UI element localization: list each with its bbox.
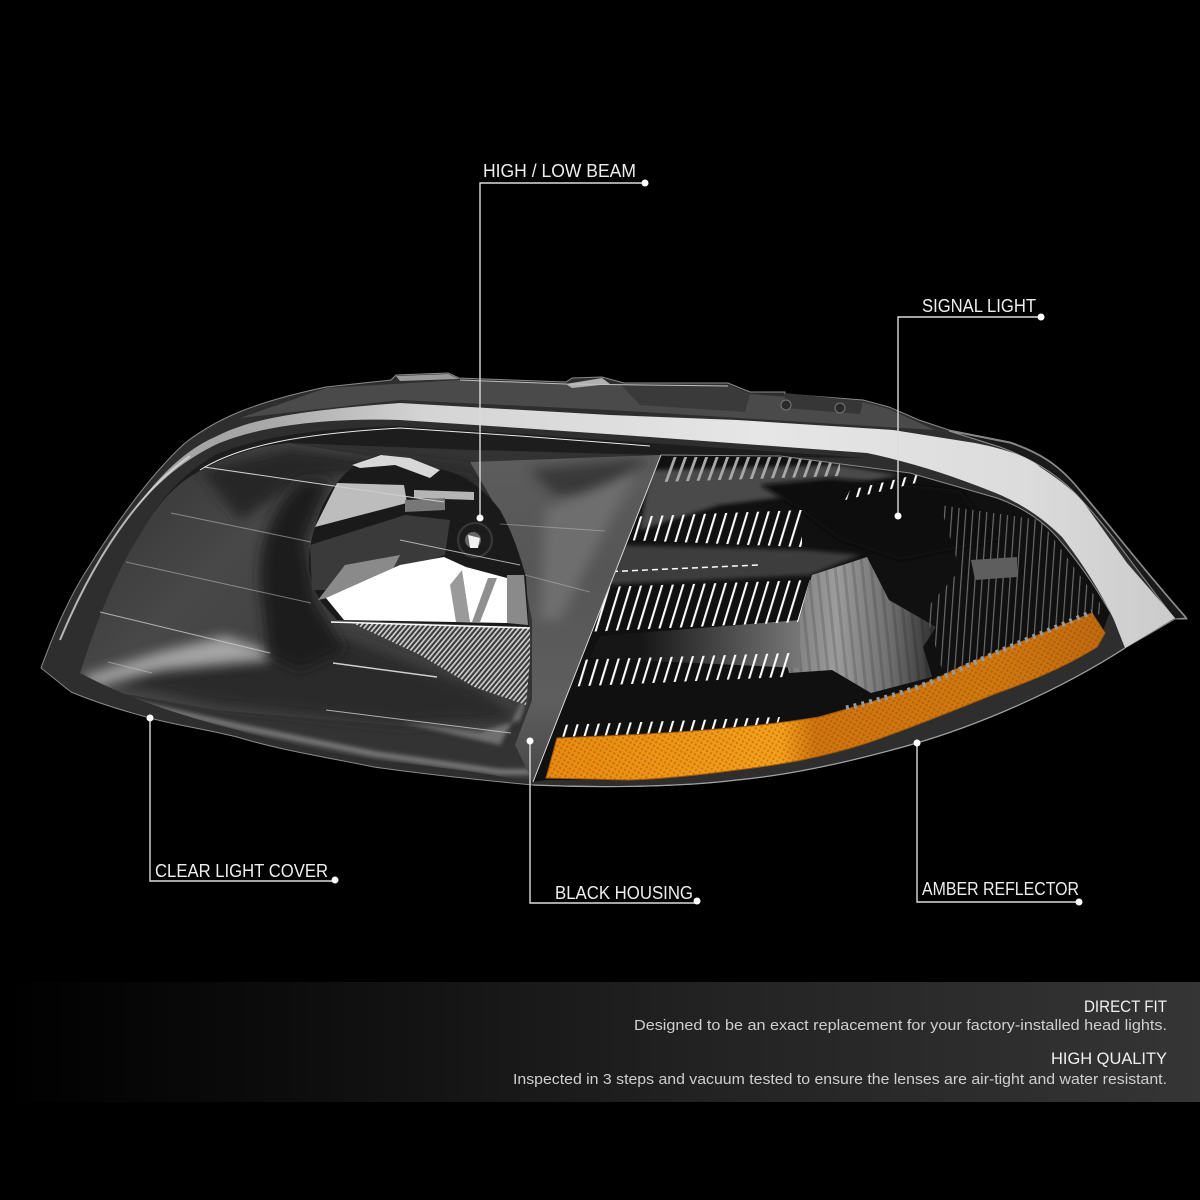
callout: black housing: BLACK HOUSING [555, 883, 693, 903]
headlight product image [41, 373, 1187, 800]
callout: clear light cover: CLEAR LIGHT COVER [155, 861, 328, 881]
right rim [949, 431, 1186, 619]
rib row one [660, 457, 840, 482]
rib row five [555, 717, 780, 737]
feature description band [0, 982, 1200, 1102]
bright white glare [326, 557, 507, 623]
top reflection [352, 455, 440, 478]
heading: high quality: HIGH QUALITY [1051, 1049, 1167, 1068]
lower rim line [533, 648, 1125, 787]
amber reflector [546, 612, 1105, 780]
grey band between ribs [600, 545, 860, 585]
lower grey band [644, 620, 800, 668]
signal light lens [530, 450, 1120, 790]
high and low beam reflector [309, 455, 529, 627]
callout: high / low beam [476, 161, 648, 522]
grey upper streaks [640, 465, 900, 530]
callout: amber reflector [914, 740, 1082, 906]
callout: high / low beam: HIGH / LOW BEAM [483, 161, 636, 181]
bulb [458, 523, 492, 557]
text: direct fit description: Designed to be an exact replacement for your factory-installed head lights. [634, 1017, 1167, 1034]
callout: black housing [526, 738, 700, 904]
dark band under strip [141, 426, 867, 533]
rib row four [563, 653, 791, 687]
clear chrome strip [134, 403, 1175, 648]
rib row two [624, 510, 802, 547]
reflector collar [260, 480, 345, 670]
top mounting bracket [240, 374, 935, 430]
bottom rim highlight [120, 700, 530, 772]
rib row three [585, 580, 810, 632]
lens moulding lines [100, 467, 605, 733]
callout: signal light [894, 296, 1044, 520]
light wedge [82, 636, 270, 688]
lower shade of bowl [100, 640, 520, 725]
right vertical ribs [925, 505, 1105, 680]
text: high quality description: Inspected in 3 steps and vacuum tested to ensure the lenses are air-tight and water resistant. [513, 1071, 1167, 1088]
heading: direct fit: DIRECT FIT [1084, 997, 1167, 1016]
callout: amber reflector: AMBER REFLECTOR [922, 879, 1079, 899]
upper dark shade [200, 448, 500, 520]
grey reflection wedge [315, 483, 407, 527]
bowl left surface [80, 443, 531, 732]
headlight outer shell [41, 373, 1187, 787]
lower ribbed reflector [352, 623, 530, 705]
black housing panel [80, 443, 660, 782]
small rib streak [845, 475, 918, 500]
grey centre reflection [780, 557, 936, 693]
reflector middle [310, 515, 450, 590]
callout: signal light: SIGNAL LIGHT [922, 296, 1036, 316]
callout: clear light cover [146, 714, 338, 884]
centre pillar [470, 455, 661, 782]
